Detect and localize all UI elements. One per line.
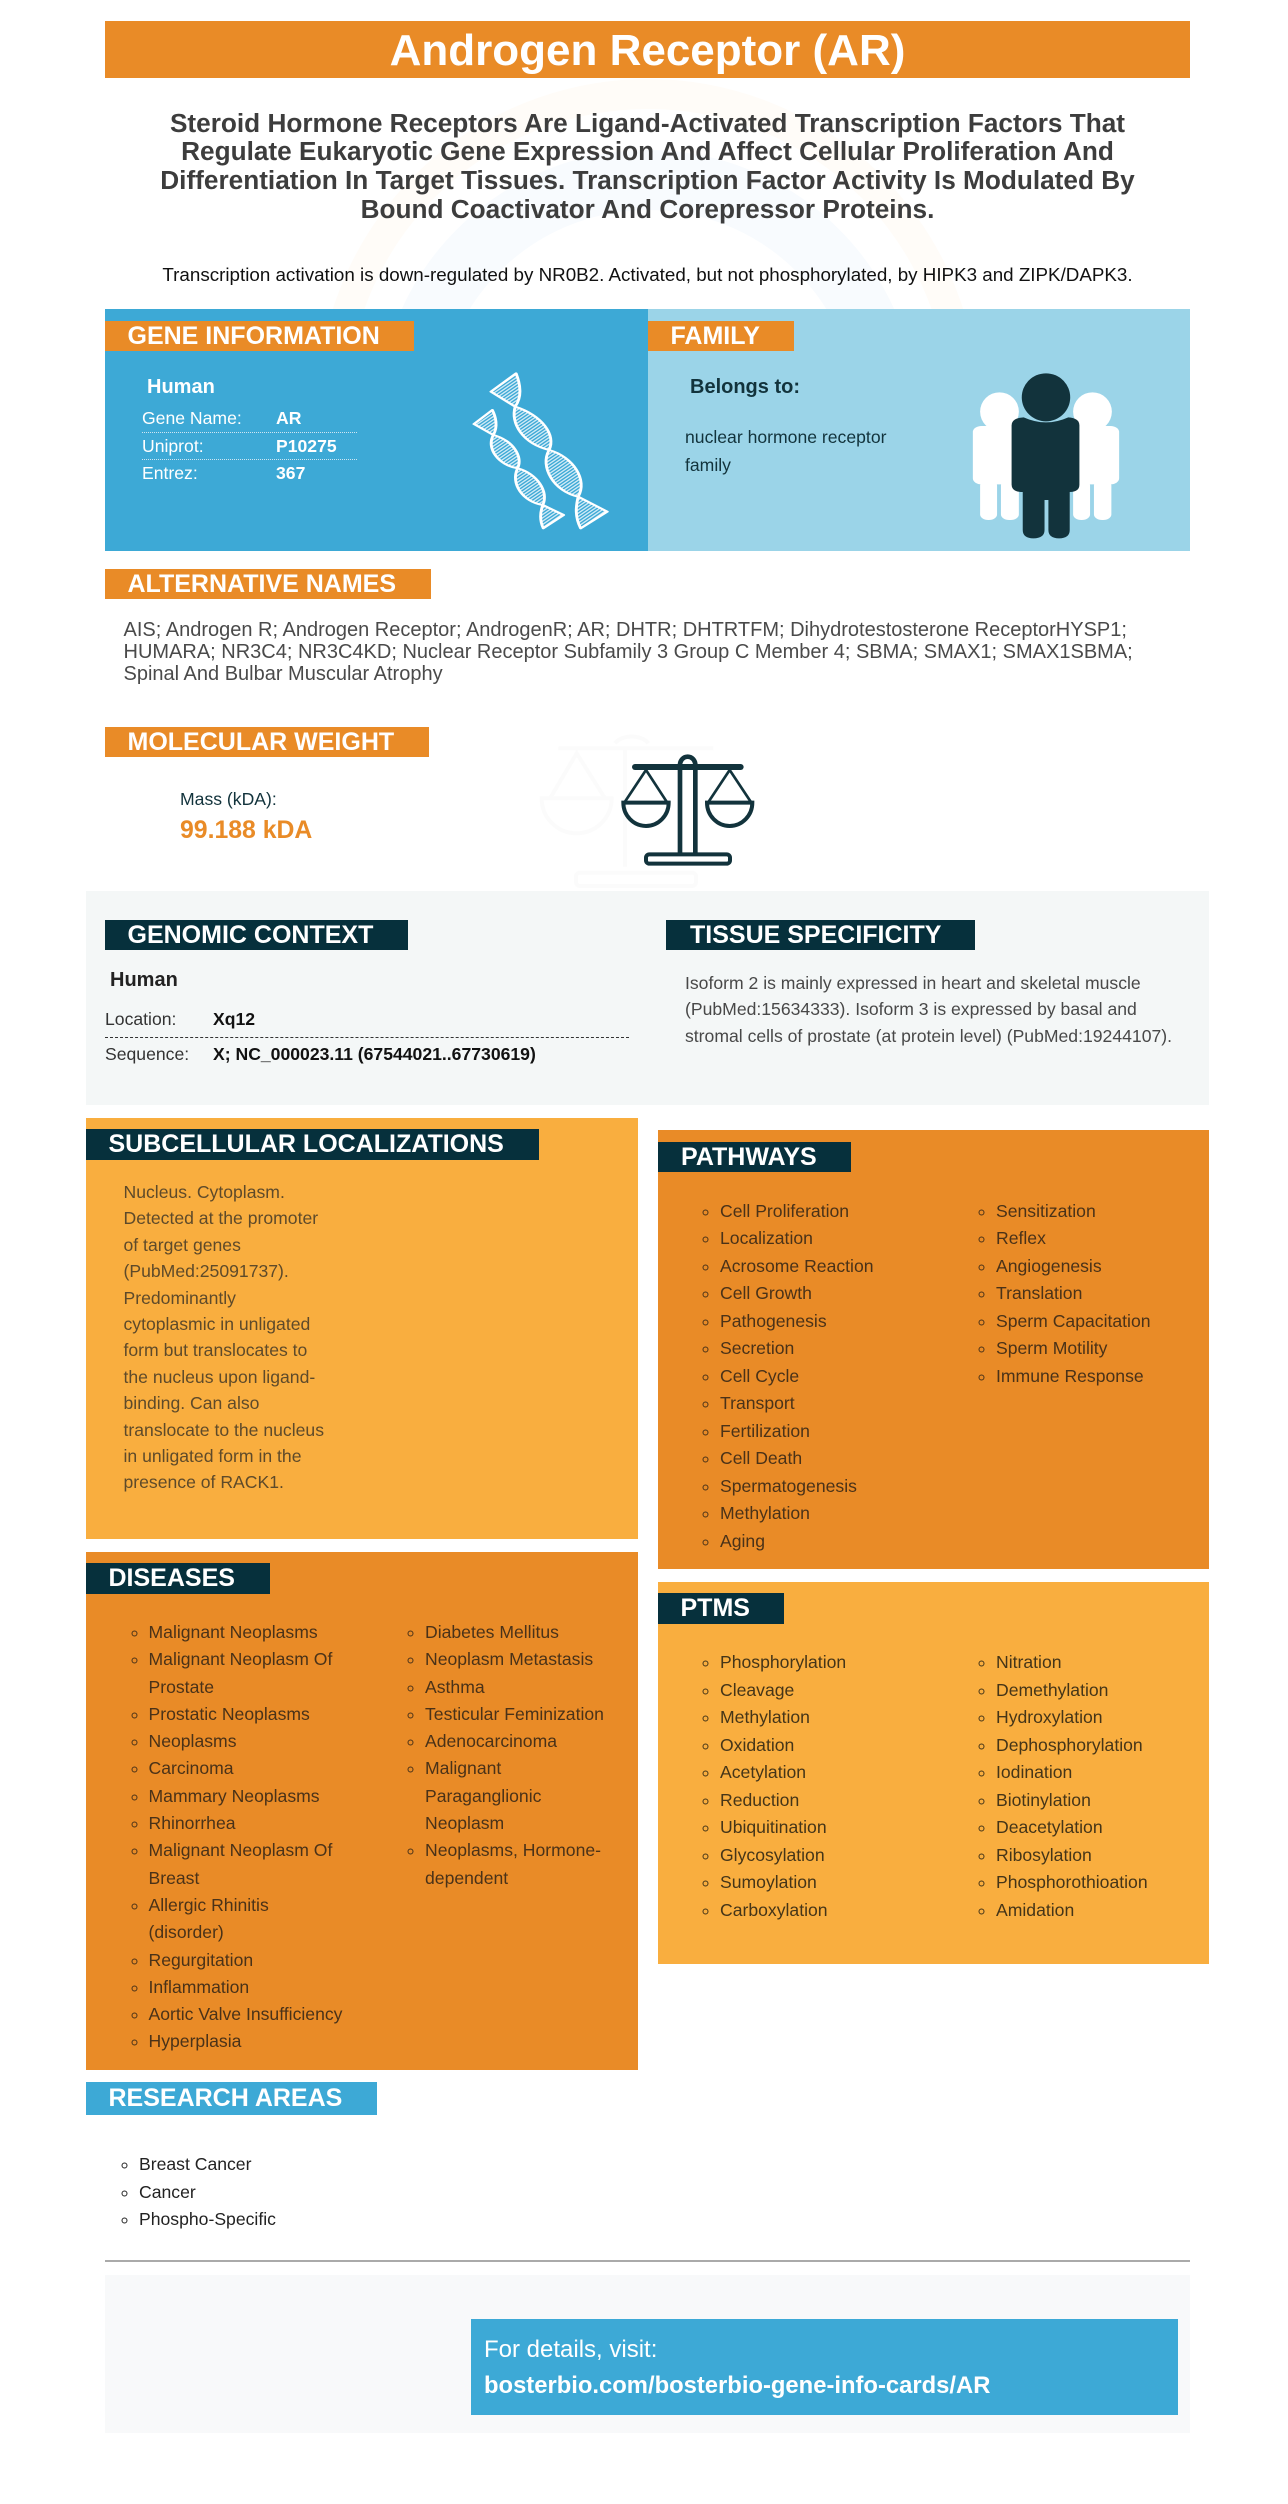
mass label: Mass (kDA): xyxy=(180,789,277,809)
list: diseases column 1: Prostate xyxy=(148,1677,214,1697)
list: ptms column 1: Cleavage xyxy=(720,1680,794,1700)
gene name row: AR xyxy=(276,408,301,428)
list: diseases column 2 xyxy=(408,1622,604,1888)
list: diseases column 1: Hyperplasia xyxy=(148,2031,241,2051)
list: ptms column 2: Nitration xyxy=(996,1652,1062,1672)
icon: balance scale xyxy=(621,754,754,866)
list: diseases column 1: Regurgitation xyxy=(148,1950,253,1970)
entrez row: Entrez: xyxy=(142,463,198,483)
uniprot row: Uniprot: xyxy=(142,436,204,456)
family text xyxy=(685,427,886,475)
panel: ptms xyxy=(658,1582,1209,1964)
list: pathways column 1: Aging xyxy=(720,1530,765,1550)
callout label: For details, visit: xyxy=(484,2336,657,2363)
callout url: bosterbio.com/bosterbio-gene-info-cards/AR xyxy=(484,2372,990,2399)
panel: footer xyxy=(105,2275,1190,2433)
heading: molecular weight: MOLECULAR WEIGHT xyxy=(128,728,394,756)
list: diseases column 1: Allergic Rhinitis xyxy=(148,1895,269,1915)
family text: nuclear hormone receptor xyxy=(685,427,886,447)
list: diseases column 1: Prostatic Neoplasms xyxy=(148,1704,310,1724)
heading: subcellular localizations: SUBCELLULAR LOCALIZATIONS xyxy=(108,1130,504,1158)
list: ptms column 2: Ribosylation xyxy=(996,1844,1092,1864)
list: diseases column 2: Paraganglionic xyxy=(425,1786,541,1806)
localization text: Detected at the promoter xyxy=(124,1208,318,1228)
sequence row: X; NC_000023.11 (67544021..67730619) xyxy=(213,1044,536,1064)
list: research areas: Cancer xyxy=(139,2182,196,2202)
list: diseases column 1: Mammary Neoplasms xyxy=(148,1786,320,1806)
subtitle: Differentiation In Target Tissues. Transcription Factor Activity Is Modulated By xyxy=(160,165,1135,195)
subtitle xyxy=(160,108,1135,224)
localization text: binding. Can also xyxy=(124,1393,259,1413)
title xyxy=(105,21,1190,78)
list: ptms column 1: Glycosylation xyxy=(720,1844,825,1864)
localization text: form but translocates to xyxy=(124,1340,307,1360)
entrez row: 367 xyxy=(276,463,305,483)
list: diseases column 1: Malignant Neoplasm Of xyxy=(148,1840,332,1860)
alternative names text xyxy=(124,619,1133,685)
belongs to label: Belongs to: xyxy=(690,376,800,398)
list: pathways column 1: Pathogenesis xyxy=(720,1310,827,1330)
localization text: of target genes xyxy=(124,1235,241,1255)
list: diseases column 1: Carcinoma xyxy=(148,1758,234,1778)
list: ptms column 1: Reduction xyxy=(720,1790,799,1810)
list: pathways column 1: Methylation xyxy=(720,1503,810,1523)
list: ptms column 2: Demethylation xyxy=(996,1680,1108,1700)
localization text: Predominantly xyxy=(124,1288,236,1308)
list: pathways column 1: Fertilization xyxy=(720,1420,810,1440)
list: diseases column 2: Neoplasm xyxy=(425,1813,504,1833)
list: research areas xyxy=(122,2154,276,2229)
list: pathways column 2: Translation xyxy=(996,1283,1082,1303)
list: ptms column 1: Phosphorylation xyxy=(720,1652,846,1672)
panel: genomic context and tissue specificity xyxy=(86,891,1209,1105)
heading: diseases xyxy=(86,1563,270,1594)
list: ptms column 2: Deacetylation xyxy=(996,1817,1103,1837)
species label: Human xyxy=(147,376,215,398)
list: diseases column 1: Aortic Valve Insufficiency xyxy=(148,2004,342,2024)
list: pathways column 2: Reflex xyxy=(996,1228,1046,1248)
heading: research areas: RESEARCH AREAS xyxy=(108,2084,342,2112)
heading: genomic context: GENOMIC CONTEXT xyxy=(128,921,373,949)
heading: diseases: DISEASES xyxy=(108,1564,235,1592)
entrez row xyxy=(142,463,305,483)
tissue specificity text xyxy=(685,973,1172,1046)
localization text: the nucleus upon ligand- xyxy=(124,1367,315,1387)
list: pathways column 2: Sensitization xyxy=(996,1200,1096,1220)
list: diseases column 2: Diabetes Mellitus xyxy=(425,1622,559,1642)
heading: pathways xyxy=(658,1142,851,1172)
list: pathways column 2: Angiogenesis xyxy=(996,1256,1102,1276)
list: pathways column 2: Sperm Capacitation xyxy=(996,1310,1151,1330)
localization text: cytoplasmic in unligated xyxy=(124,1314,310,1334)
list: diseases column 2: Neoplasm Metastasis xyxy=(425,1649,593,1669)
list: pathways column 1: Acrosome Reaction xyxy=(720,1256,874,1276)
list: pathways column 1: Cell Proliferation xyxy=(720,1200,849,1220)
list: diseases column 2: Asthma xyxy=(425,1677,485,1697)
list: pathways column 2: Immune Response xyxy=(996,1366,1144,1386)
heading: ptms xyxy=(658,1593,784,1624)
tissue specificity text: (PubMed:15634333). Isoform 3 is expressed by basal and xyxy=(685,999,1137,1019)
heading: pathways: PATHWAYS xyxy=(681,1143,817,1171)
panel: pathways xyxy=(658,1130,1209,1569)
heading: tissue specificity: TISSUE SPECIFICITY xyxy=(690,921,941,949)
list: ptms column 2: Iodination xyxy=(996,1762,1072,1782)
list: diseases column 2: dependent xyxy=(425,1868,508,1888)
localization text: (PubMed:25091737). xyxy=(124,1261,289,1281)
list: ptms column 1 xyxy=(702,1652,846,1920)
panel: subcellular localizations xyxy=(86,1118,638,1539)
list: pathways column 1: Spermatogenesis xyxy=(720,1476,857,1496)
list: pathways column 2 xyxy=(978,1200,1151,1386)
alternative names text: AIS; Androgen R; Androgen Receptor; AndrogenR; AR; DHTR; DHTRTFM; Dihydrotestosterone ReceptorHYSP1; xyxy=(124,619,1127,641)
list: diseases column 2: Malignant xyxy=(425,1758,501,1778)
subtitle: Steroid Hormone Receptors Are Ligand-Activated Transcription Factors That xyxy=(170,108,1125,138)
list: ptms column 2: Amidation xyxy=(996,1900,1074,1920)
species label: Human xyxy=(110,969,178,991)
heading: gene information: GENE INFORMATION xyxy=(128,322,380,350)
uniprot row: P10275 xyxy=(276,436,337,456)
list: diseases column 1: Neoplasms xyxy=(148,1731,237,1751)
tissue specificity text: stromal cells of prostate (at protein level) (PubMed:19244107). xyxy=(685,1026,1172,1046)
family text: family xyxy=(685,455,731,475)
list: pathways column 1: Cell Death xyxy=(720,1448,802,1468)
list: pathways column 1 xyxy=(702,1200,874,1550)
subtitle: Regulate Eukaryotic Gene Expression And Affect Cellular Proliferation And xyxy=(181,136,1114,166)
list: pathways column 1: Cell Cycle xyxy=(720,1366,799,1386)
callout: details link xyxy=(471,2319,1178,2415)
gene name row xyxy=(142,408,301,428)
title: Androgen Receptor (AR) xyxy=(390,26,905,75)
heading: family: FAMILY xyxy=(670,322,760,350)
location row: Xq12 xyxy=(213,1009,255,1029)
uniprot row xyxy=(142,436,337,456)
location row: Location: xyxy=(105,1009,176,1029)
list: diseases column 2: Testicular Feminization xyxy=(425,1704,604,1724)
intro text: Transcription activation is down-regulated by NR0B2. Activated, but not phosphorylated, by HIPK3 and ZIPK/DAPK3. xyxy=(162,264,1133,285)
list: diseases column 1 xyxy=(132,1622,342,2051)
list: diseases column 1: (disorder) xyxy=(148,1922,224,1942)
localization text: Nucleus. Cytoplasm. xyxy=(124,1182,285,1202)
panel: diseases xyxy=(86,1552,638,2070)
list: ptms column 2 xyxy=(978,1652,1148,1920)
panel: gene information xyxy=(105,309,648,551)
heading: alternative names: ALTERNATIVE NAMES xyxy=(128,570,396,598)
list: diseases column 1: Breast xyxy=(148,1868,199,1888)
panel: family xyxy=(648,309,1190,551)
list: diseases column 1: Inflammation xyxy=(148,1977,249,1997)
list: research areas: Phospho-Specific xyxy=(139,2209,276,2229)
localization text: translocate to the nucleus xyxy=(124,1420,324,1440)
list: pathways column 1: Secretion xyxy=(720,1338,794,1358)
list: diseases column 2: Neoplasms, Hormone- xyxy=(425,1840,601,1860)
icon: people xyxy=(972,373,1120,538)
location row xyxy=(105,1009,255,1029)
alternative names text: HUMARA; NR3C4; NR3C4KD; Nuclear Receptor Subfamily 3 Group C Member 4; SBMA; SMAX1; SMAX1SBMA; xyxy=(124,641,1133,663)
localization text xyxy=(124,1182,324,1492)
list: diseases column 2: Adenocarcinoma xyxy=(425,1731,557,1751)
list: ptms column 1: Sumoylation xyxy=(720,1872,817,1892)
list: pathways column 1: Transport xyxy=(720,1393,795,1413)
list: diseases column 1: Malignant Neoplasms xyxy=(148,1622,318,1642)
list: ptms column 1: Carboxylation xyxy=(720,1900,828,1920)
gene name row: Gene Name: xyxy=(142,408,242,428)
list: ptms column 1: Ubiquitination xyxy=(720,1817,827,1837)
list: ptms column 1: Oxidation xyxy=(720,1734,794,1754)
localization text: in unligated form in the xyxy=(124,1446,302,1466)
list: diseases column 1: Malignant Neoplasm Of xyxy=(148,1649,332,1669)
watermark background xyxy=(0,78,1288,318)
list: pathways column 1: Cell Growth xyxy=(720,1283,812,1303)
list: ptms column 2: Phosphorothioation xyxy=(996,1872,1148,1892)
list: pathways column 2: Sperm Motility xyxy=(996,1338,1107,1358)
list: pathways column 1: Localization xyxy=(720,1228,813,1248)
tissue specificity text: Isoform 2 is mainly expressed in heart and skeletal muscle xyxy=(685,973,1141,993)
list: ptms column 2: Biotinylation xyxy=(996,1790,1091,1810)
list: research areas: Breast Cancer xyxy=(139,2154,251,2174)
heading: family xyxy=(648,321,794,351)
list: ptms column 2: Hydroxylation xyxy=(996,1707,1103,1727)
heading: ptms: PTMS xyxy=(680,1594,750,1622)
icon: dna helix xyxy=(472,372,609,530)
localization text: presence of RACK1. xyxy=(124,1472,284,1492)
list: ptms column 2: Dephosphorylation xyxy=(996,1734,1143,1754)
list: ptms column 1: Methylation xyxy=(720,1707,810,1727)
list: ptms column 1: Acetylation xyxy=(720,1762,806,1782)
mass value: 99.188 kDA xyxy=(180,817,312,844)
heading: research areas xyxy=(86,2082,377,2115)
sequence row: Sequence: xyxy=(105,1044,189,1064)
list: diseases column 1: Rhinorrhea xyxy=(148,1813,236,1833)
subtitle: Bound Coactivator And Corepressor Proteins. xyxy=(361,194,934,224)
alternative names text: Spinal And Bulbar Muscular Atrophy xyxy=(124,663,443,685)
